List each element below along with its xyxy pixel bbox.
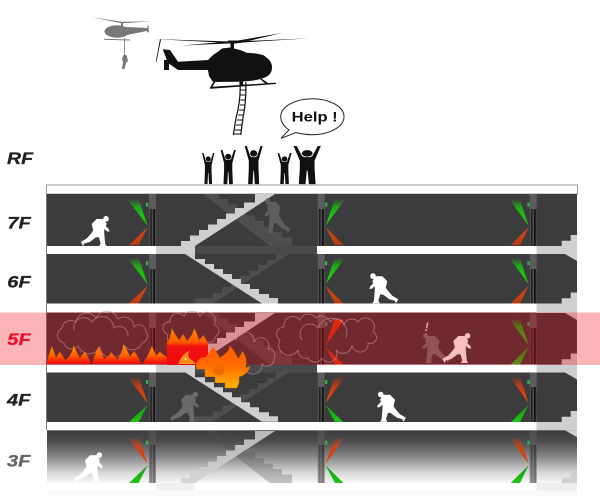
red highlight band 5F xyxy=(0,312,600,365)
fuselage xyxy=(163,48,272,82)
exclamation mark: ! xyxy=(425,320,429,334)
exit lights and cones 4F xyxy=(128,377,530,422)
exit lights and cones 6F xyxy=(128,258,530,304)
rotor blades xyxy=(153,33,310,50)
3F gradient background xyxy=(47,430,577,483)
runner 6F xyxy=(369,273,398,303)
tail rotor xyxy=(156,39,161,62)
building floors background xyxy=(46,194,577,483)
slab 7F/6F xyxy=(47,246,577,261)
rope ladder xyxy=(233,82,246,135)
exit lights and cones 5F right xyxy=(325,320,530,364)
roof slab xyxy=(46,185,578,194)
slab 5F/4F xyxy=(47,364,577,380)
label 5F: 5F xyxy=(7,330,31,349)
slab under 3F xyxy=(47,483,577,498)
stairs 3F xyxy=(181,431,292,483)
slab 6F/5F xyxy=(47,304,577,320)
fire row xyxy=(47,328,208,365)
runner 5F xyxy=(442,333,471,363)
right side stair steps xyxy=(562,235,577,483)
floor labels xyxy=(6,149,34,471)
slab 4F/3F xyxy=(47,422,577,437)
runner 7F xyxy=(81,216,110,246)
shadow runner 4F on stairs xyxy=(170,392,199,422)
skids xyxy=(210,79,276,89)
stairs 5F xyxy=(181,313,292,365)
red cones 5F centre column xyxy=(326,320,344,364)
runner 4F xyxy=(377,392,406,422)
columns xyxy=(149,194,537,483)
shadow runner 7F on stairs xyxy=(264,198,290,233)
stairs 7F xyxy=(181,194,292,246)
help text: Help ! xyxy=(292,109,338,125)
label 3F: 3F xyxy=(7,452,31,471)
floor slabs xyxy=(47,246,577,498)
label 6F: 6F xyxy=(7,273,31,292)
fire mass at stair xyxy=(167,328,208,365)
runner 3F xyxy=(74,452,103,482)
shadow runner 5F xyxy=(422,333,450,363)
label 7F: 7F xyxy=(7,214,31,232)
speech bubble xyxy=(281,99,344,138)
large helicopter xyxy=(153,33,310,89)
stairs 4F xyxy=(185,372,289,422)
smoke clouds xyxy=(58,311,377,376)
small helicopter with rescuer xyxy=(92,17,152,69)
exit lights and cones 3F xyxy=(128,438,530,483)
large fire on stairs xyxy=(196,346,250,388)
people on the roof xyxy=(202,146,321,184)
label 4F: 4F xyxy=(6,391,31,410)
stairs 6F xyxy=(185,254,289,304)
label RF: RF xyxy=(7,149,34,168)
exit lights and cones 7F xyxy=(128,200,530,245)
